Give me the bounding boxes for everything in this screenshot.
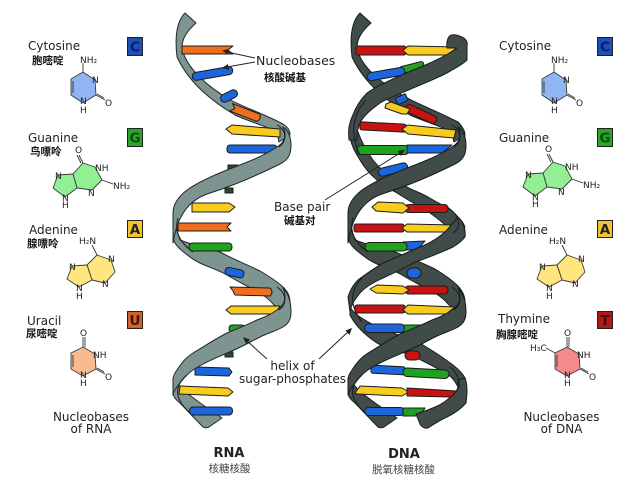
label: thymine bbox=[496, 312, 550, 342]
molecule: guanine: N bbox=[62, 194, 69, 204]
callout: helix of sugar-phosphates: helix of bbox=[270, 359, 315, 373]
label: guanine: 鸟嘌呤 bbox=[30, 144, 62, 159]
molecule: cytosine: N bbox=[551, 97, 558, 107]
label: uracil: Uracil bbox=[27, 314, 61, 328]
title: DNA bbox=[372, 447, 435, 477]
molecule: cytosine: O bbox=[576, 99, 583, 109]
callout: helix of sugar-phosphates bbox=[239, 328, 352, 386]
arrow: to base pair bbox=[325, 150, 405, 200]
molecule: adenine: N bbox=[578, 255, 585, 265]
molecule: guanine: N bbox=[558, 188, 565, 198]
label: cytosine: Cytosine bbox=[28, 39, 80, 53]
molecule: adenine: N bbox=[108, 255, 115, 265]
label: cytosine: Cytosine bbox=[499, 39, 551, 53]
label: adenine: 腺嘌呤 bbox=[27, 236, 59, 251]
caption: nucleobases of RNA: of RNA bbox=[71, 422, 112, 436]
label: adenine bbox=[27, 223, 78, 251]
RNA nucleobases bbox=[178, 46, 280, 415]
molecule: thymine: N bbox=[564, 371, 571, 381]
badge: U bbox=[128, 312, 142, 329]
title: RNA: RNA bbox=[214, 446, 244, 461]
callout: nucleobases: 核酸碱基 bbox=[264, 70, 306, 85]
molecule: guanine: H bbox=[62, 201, 69, 211]
molecule: cytosine: O bbox=[105, 99, 112, 109]
molecule: cytosine bbox=[71, 56, 112, 116]
molecule: cytosine bbox=[542, 56, 583, 116]
badge: C: C bbox=[600, 40, 610, 56]
molecule: guanine: NH₂ bbox=[583, 181, 600, 191]
badge: T: T bbox=[600, 313, 610, 329]
callout: helix of sugar-phosphates: sugar-phosphates bbox=[239, 372, 346, 386]
arrow: to orange base bbox=[222, 49, 255, 58]
label: uracil: 尿嘧啶 bbox=[26, 326, 58, 341]
callout: nucleobases: Nucleobases bbox=[256, 53, 335, 68]
molecule: guanine: NH₂ bbox=[113, 182, 130, 192]
arrow: to DNA ribbon bbox=[319, 328, 352, 359]
molecule: guanine: N bbox=[532, 193, 539, 203]
molecule: guanine: H bbox=[532, 200, 539, 210]
molecule: guanine: O bbox=[75, 146, 82, 156]
panel: DNA double helix bbox=[348, 13, 467, 428]
badge: G: G bbox=[599, 130, 611, 146]
molecule: guanine: O bbox=[545, 145, 552, 155]
molecule: guanine bbox=[523, 145, 600, 210]
molecule: adenine: H₂N bbox=[549, 237, 566, 247]
molecule: cytosine: N bbox=[80, 97, 87, 107]
molecule: thymine: H bbox=[564, 379, 571, 389]
molecule: adenine: H bbox=[546, 292, 553, 302]
molecule: adenine: N bbox=[76, 284, 83, 294]
badge: C bbox=[598, 38, 612, 56]
label: thymine: 胸腺嘧啶 bbox=[496, 327, 538, 342]
label: uracil bbox=[26, 314, 61, 341]
caption: nucleobases of RNA bbox=[53, 410, 129, 436]
badge: A bbox=[598, 220, 612, 238]
molecule: uracil: NH bbox=[93, 351, 106, 361]
molecule: cytosine: NH₂ bbox=[80, 56, 98, 66]
label: guanine: Guanine bbox=[28, 131, 78, 145]
molecule: adenine: N bbox=[102, 280, 109, 290]
DNA base pairs bbox=[354, 46, 458, 416]
badge: T bbox=[598, 312, 612, 329]
molecule: adenine: N bbox=[572, 280, 579, 290]
callout: base pair: 碱基对 bbox=[284, 213, 316, 228]
molecule: uracil: N bbox=[80, 371, 87, 381]
molecule: adenine: N bbox=[546, 284, 553, 294]
molecule: guanine: N bbox=[88, 189, 95, 199]
label: guanine bbox=[28, 131, 78, 159]
arrow: to blue base bbox=[222, 62, 255, 70]
label: cytosine: 胞嘧啶 bbox=[32, 53, 64, 68]
label: adenine: Adenine bbox=[29, 223, 78, 237]
molecule: adenine bbox=[67, 237, 115, 302]
molecule: adenine: H bbox=[76, 292, 83, 302]
title: RNA bbox=[208, 446, 251, 476]
DNA back ribbons bbox=[348, 13, 465, 428]
molecule: adenine bbox=[537, 237, 585, 302]
label: adenine: Adenine bbox=[499, 223, 548, 237]
molecule: guanine bbox=[53, 146, 130, 211]
callout: nucleobases bbox=[222, 49, 335, 85]
molecule: thymine: O bbox=[564, 329, 571, 339]
molecule: cytosine: H bbox=[80, 106, 87, 116]
title: RNA: 核糖核酸 bbox=[208, 461, 251, 476]
badge: C bbox=[128, 38, 142, 56]
molecule: cytosine: NH₂ bbox=[551, 56, 568, 66]
molecule: thymine bbox=[530, 329, 596, 389]
molecule: uracil bbox=[71, 329, 112, 389]
caption: nucleobases of RNA: Nucleobases bbox=[53, 410, 129, 424]
label: guanine: Guanine bbox=[499, 131, 549, 145]
callout: base pair: Base pair bbox=[274, 200, 330, 214]
molecule: guanine: N bbox=[55, 172, 62, 182]
molecule: thymine: NH bbox=[577, 351, 590, 361]
molecule: cytosine: H bbox=[551, 106, 558, 116]
RNA front ribbon bbox=[173, 125, 291, 413]
molecule: uracil: O bbox=[105, 373, 112, 383]
molecule: thymine: H₃C bbox=[530, 344, 547, 354]
title: DNA: 脱氧核糖核酸 bbox=[372, 462, 435, 477]
molecule: uracil: H bbox=[80, 379, 87, 389]
molecule: guanine: NH bbox=[95, 164, 108, 174]
panel: nucleobases of DNA bbox=[496, 38, 612, 436]
badge: G: G bbox=[129, 130, 141, 146]
molecule: guanine: N bbox=[525, 171, 532, 181]
molecule: guanine: NH bbox=[565, 163, 578, 173]
badge: A: A bbox=[130, 222, 141, 238]
badge: U: U bbox=[130, 313, 140, 329]
panel: nucleobases of RNA bbox=[26, 38, 142, 436]
molecule: adenine: N bbox=[539, 263, 546, 273]
badge: A: A bbox=[600, 222, 611, 238]
molecule: thymine: O bbox=[589, 373, 596, 383]
molecule: cytosine: N bbox=[563, 76, 570, 86]
badge: G bbox=[128, 128, 142, 146]
caption: nucleobases of DNA bbox=[523, 410, 600, 436]
molecule: uracil: O bbox=[80, 329, 87, 339]
badge: G bbox=[598, 128, 612, 146]
callout: base pair bbox=[274, 150, 405, 228]
arrow: to RNA ribbon bbox=[243, 337, 267, 359]
badge: C: C bbox=[130, 40, 140, 56]
RNA back ribbon bbox=[173, 13, 290, 428]
molecule: adenine: N bbox=[69, 263, 76, 273]
DNA front ribbons bbox=[348, 35, 467, 428]
label: thymine: Thymine bbox=[497, 312, 550, 326]
badge: A bbox=[128, 220, 142, 238]
panel: RNA helix bbox=[173, 13, 291, 428]
label: cytosine bbox=[28, 39, 80, 68]
caption: nucleobases of DNA: of DNA bbox=[541, 422, 583, 436]
caption: nucleobases of DNA: Nucleobases bbox=[523, 410, 600, 424]
molecule: cytosine: N bbox=[92, 76, 99, 86]
molecule: adenine: H₂N bbox=[79, 237, 96, 247]
title: DNA: DNA bbox=[388, 447, 420, 462]
